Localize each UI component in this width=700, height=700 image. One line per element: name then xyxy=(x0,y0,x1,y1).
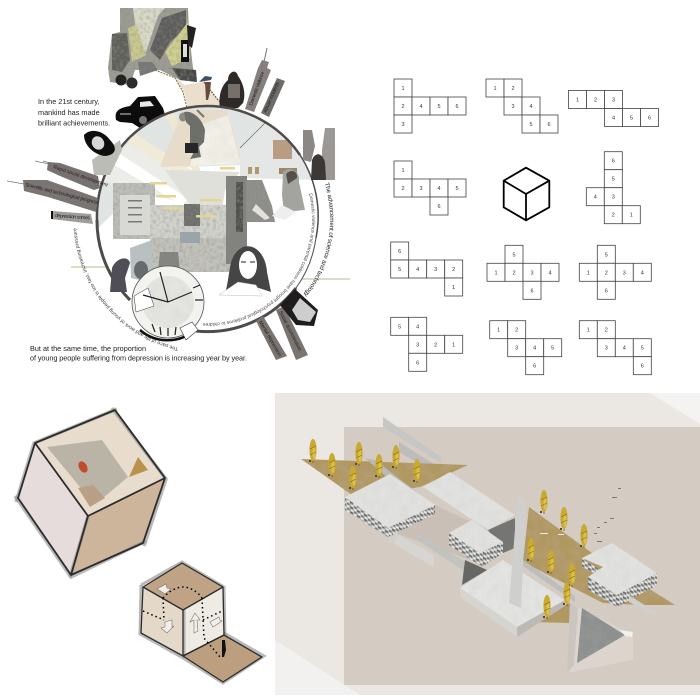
net 4: 2 xyxy=(401,186,405,192)
building bar: abuse incidents: Abuse incidents xyxy=(262,81,281,114)
building bar: scientific and technological progress xyxy=(7,180,99,212)
net 4 xyxy=(394,161,466,215)
intro text: mankind has made xyxy=(38,108,100,117)
birds xyxy=(540,488,621,542)
net 6: 3 xyxy=(434,267,437,273)
courtyard and walls xyxy=(395,505,515,585)
net 4: 5 xyxy=(455,186,459,192)
net 1: 6 xyxy=(455,104,459,110)
building bars: social discrimination and mental depression xyxy=(256,306,308,360)
panel: site axonometric xyxy=(275,393,700,695)
net 7: 5 xyxy=(512,252,516,258)
concrete block west xyxy=(345,474,435,545)
net 3: 6 xyxy=(648,116,651,122)
net 2: 4 xyxy=(529,104,533,110)
net 11: 5 xyxy=(641,346,644,352)
net 11: 3 xyxy=(605,346,608,352)
closing text: But at the same time, the proportion xyxy=(30,344,146,353)
trees xyxy=(309,439,588,619)
net 4: 1 xyxy=(401,168,405,174)
net 1: 1 xyxy=(401,86,405,92)
curved caption: domestic violence: Domestic violence and parental coldness have brought psychological problems to children xyxy=(202,193,316,326)
net 11: 6 xyxy=(641,364,644,370)
icon: central cube xyxy=(504,168,549,220)
net 2: 3 xyxy=(511,104,515,110)
building bar: depression comes: depression comes xyxy=(55,213,91,221)
net 2: 2 xyxy=(511,86,515,92)
net 7: 3 xyxy=(530,270,534,276)
panel: depression collage diagram xyxy=(7,8,350,362)
net 11: 4 xyxy=(623,346,626,352)
intro text: In the 21st century, xyxy=(38,97,100,106)
figures near road xyxy=(199,72,244,108)
net 5 xyxy=(586,152,640,224)
crying woman portrait xyxy=(219,246,271,296)
net 2: 1 xyxy=(493,86,497,92)
net 1: 4 xyxy=(419,104,423,110)
concrete block east xyxy=(582,543,662,620)
plaza xyxy=(460,560,575,637)
building bar: scientific and technological progress: Scientific and technological progress xyxy=(25,182,99,206)
net 9: 5 xyxy=(398,324,401,330)
net 8: 4 xyxy=(641,270,644,276)
building bar: depression comes xyxy=(51,211,93,224)
panel: watercolour cube sketches xyxy=(15,408,264,683)
building bar: abuse incidents xyxy=(261,78,285,117)
icon: hand on black shape xyxy=(280,289,318,326)
net 3 xyxy=(568,90,658,126)
closing text: of young people suffering from depression is increasing year by year. xyxy=(30,354,247,362)
face portrait on the left xyxy=(84,131,122,175)
net 1: 3 xyxy=(401,122,405,128)
net 11 xyxy=(579,321,651,375)
net 8: 1 xyxy=(587,270,590,276)
net 7: 4 xyxy=(548,270,552,276)
left soil with trees xyxy=(301,459,468,495)
triangular pit xyxy=(567,603,633,673)
net 5: 4 xyxy=(594,195,597,201)
disc scene xyxy=(98,107,311,280)
building bar: rapid social development: Rapid social development xyxy=(52,164,109,189)
net 9 xyxy=(391,317,463,371)
icon: black car xyxy=(116,96,166,128)
net 10: 2 xyxy=(515,328,518,334)
net 6: 2 xyxy=(452,267,455,273)
net 8: 2 xyxy=(605,270,608,276)
net 10 xyxy=(490,321,562,375)
net 6: 5 xyxy=(398,267,401,273)
net 3: 3 xyxy=(612,98,615,104)
net 8 xyxy=(579,245,651,299)
net 8: 6 xyxy=(605,288,608,294)
building bar: domestic violence xyxy=(245,48,271,112)
net 3: 4 xyxy=(612,116,615,122)
net 10: 1 xyxy=(497,328,500,334)
building bar: domestic violence: Domestic violence xyxy=(248,71,266,107)
curved caption: advancement of science: The advancement of science and technology xyxy=(304,182,334,297)
right soil xyxy=(523,507,675,605)
net 9: 3 xyxy=(416,342,419,348)
hooded person xyxy=(110,258,130,292)
net 1 xyxy=(394,79,466,133)
building bars: social discrimination and mental depression: Social discrimination xyxy=(277,310,303,352)
net 10: 5 xyxy=(551,346,554,352)
net 3: 2 xyxy=(594,98,597,104)
net 10: 4 xyxy=(533,346,536,352)
net 3: 5 xyxy=(630,116,633,122)
net 5: 3 xyxy=(612,195,615,201)
net 8: 3 xyxy=(623,270,626,276)
net 11: 2 xyxy=(605,328,608,334)
closing text xyxy=(30,344,247,362)
net 5: 5 xyxy=(612,177,615,183)
net 7: 2 xyxy=(512,270,516,276)
net 1: 5 xyxy=(437,104,441,110)
net 11: 1 xyxy=(587,328,590,334)
net 6 xyxy=(391,242,463,296)
net 2 xyxy=(486,79,558,133)
accent lines xyxy=(71,267,350,279)
net 3: 1 xyxy=(576,98,579,104)
net 10: 3 xyxy=(515,346,518,352)
right silhouettes xyxy=(303,128,335,180)
small cube with route xyxy=(140,562,264,683)
net 8: 5 xyxy=(605,252,608,258)
net 4: 3 xyxy=(419,186,423,192)
net 9: 1 xyxy=(452,342,455,348)
winding road xyxy=(155,70,228,108)
net 7 xyxy=(487,245,559,299)
building bars: social discrimination and mental depression: Mental depression xyxy=(257,320,283,358)
net 10: 6 xyxy=(533,364,536,370)
intro text xyxy=(38,97,110,128)
net 7: 6 xyxy=(530,288,534,294)
curved caption: pace of life: The pace of life and work of young people is too fast, increasing pressure xyxy=(74,228,178,351)
net 2: 5 xyxy=(529,122,533,128)
net 6: 6 xyxy=(398,249,401,255)
panel: cube net diagrams xyxy=(391,79,658,375)
net 5: 1 xyxy=(630,213,633,219)
back walls xyxy=(383,417,441,476)
clock xyxy=(132,266,204,340)
building bar: rapid social development xyxy=(35,161,109,190)
net 5: 2 xyxy=(612,213,615,219)
net 6: 4 xyxy=(416,267,419,273)
concrete block centre xyxy=(449,520,503,567)
intro text: brilliant achievements. xyxy=(38,118,110,128)
man with briefcase xyxy=(179,110,205,159)
large open cube xyxy=(15,408,166,577)
street billboard and bin details xyxy=(116,25,196,88)
net 9: 4 xyxy=(416,324,419,330)
net 9: 6 xyxy=(416,360,419,366)
net 6: 1 xyxy=(452,285,455,291)
glass panel with face xyxy=(130,240,152,283)
net 1: 2 xyxy=(401,104,405,110)
net 9: 2 xyxy=(434,342,437,348)
concrete block north xyxy=(423,472,515,530)
street photo collage xyxy=(108,8,197,85)
net 5: 6 xyxy=(612,159,615,165)
disc ring xyxy=(97,106,318,332)
net 4: 4 xyxy=(437,186,441,192)
paper background xyxy=(275,393,700,695)
obelisk xyxy=(509,493,526,608)
net 2: 6 xyxy=(547,122,551,128)
net 4: 6 xyxy=(437,204,441,210)
net 7: 1 xyxy=(494,270,498,276)
